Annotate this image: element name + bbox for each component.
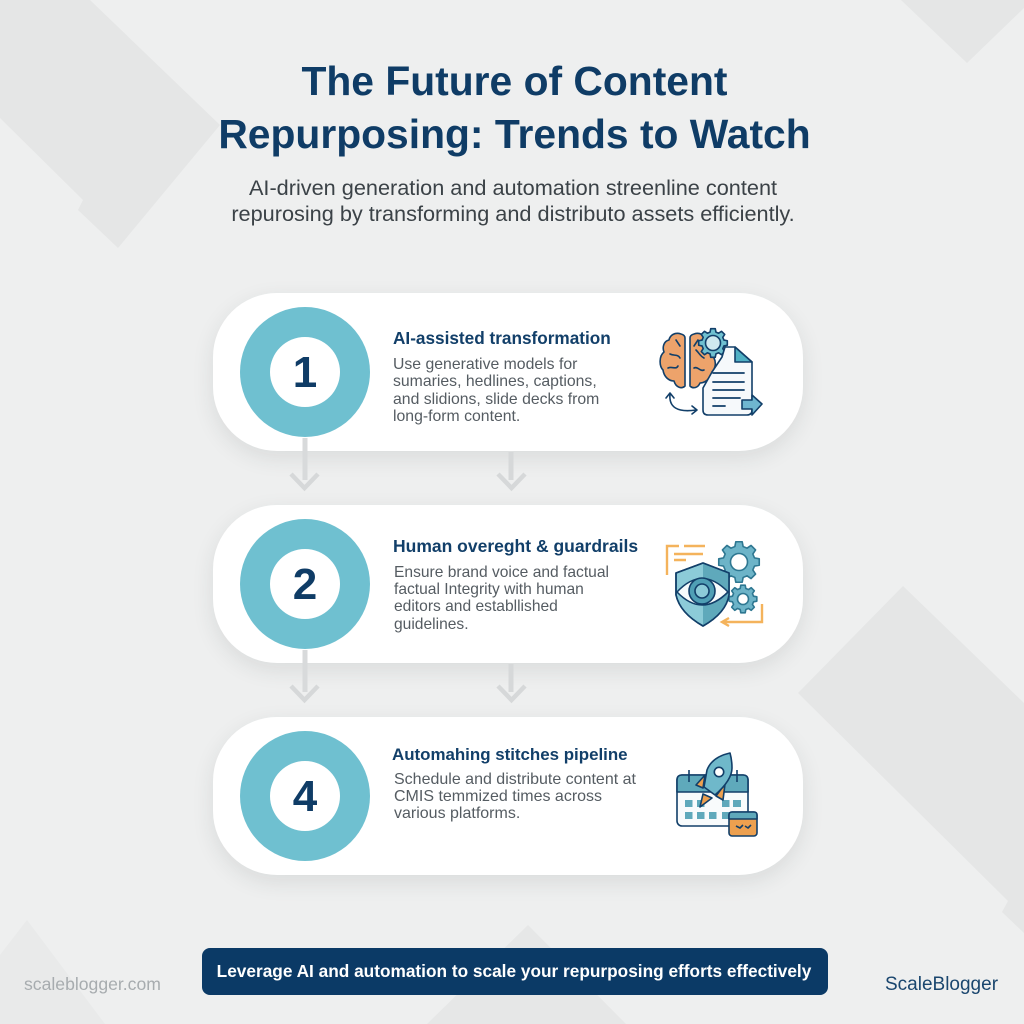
icon: brain and document [659,328,763,416]
step 2 text: editors and establlished [394,598,558,615]
arrow: step 1 to step 2 left [290,438,320,491]
step 2 heading: Human overeght & guardrails [393,536,638,556]
panel: step 1 [213,293,803,451]
panel: step 2 [213,505,803,663]
footer right: brand: ScaleBlogger [885,974,998,995]
step 1 heading: AI-assisted transformation [393,328,611,348]
number badge 1 [240,307,370,437]
footer left: website: scaleblogger.com [24,974,161,994]
number badge 4 [240,731,370,861]
title: Repurposing: Trends to Watch [218,110,811,156]
step 2 text: guidelines. [394,616,469,633]
number badge 1: 1 [293,348,317,397]
step 3 text: various platforms. [394,805,520,822]
callout banner: Leverage AI and automation to scale your repurposing efforts effectively [217,961,811,981]
subtitle: repurosing by transforming and distributo assets efficiently. [231,201,795,226]
step 3 text: Schedule and distribute content at [394,771,636,788]
subtitle: AI-driven generation and automation streenline content [249,175,777,200]
step 3 text [394,771,636,822]
step 3 text: CMIS temmized times across [394,788,602,805]
number badge 4: 4 [293,772,317,821]
step 1 text: Use generative models for [393,356,577,373]
title: The Future of Content [301,58,728,104]
title [218,58,811,156]
step 2 text [394,564,609,633]
icon: rocket and calendar [676,752,758,837]
icon: shield, eye and gears [666,541,764,627]
number badge 2: 2 [293,560,317,609]
callout banner [202,948,828,995]
arrow: step 1 to step 2 right [496,452,526,491]
number badge 2 [240,519,370,649]
step 1 text: long-form content. [393,408,520,425]
arrow: step 2 to step 3 left [290,650,320,703]
panel: step 3 [213,717,803,875]
step 1 text: sumaries, hedlines, captions, [393,373,597,390]
step 1 text: and slidions, slide decks from [393,391,599,408]
step 2 text: factual Integrity with human [394,581,584,598]
arrow: step 2 to step 3 right [496,664,526,703]
subtitle [231,175,795,226]
step 3 heading: Automahing stitches pipeline [392,745,628,764]
step 1 text [393,356,599,425]
step 2 text: Ensure brand voice and factual [394,564,609,581]
